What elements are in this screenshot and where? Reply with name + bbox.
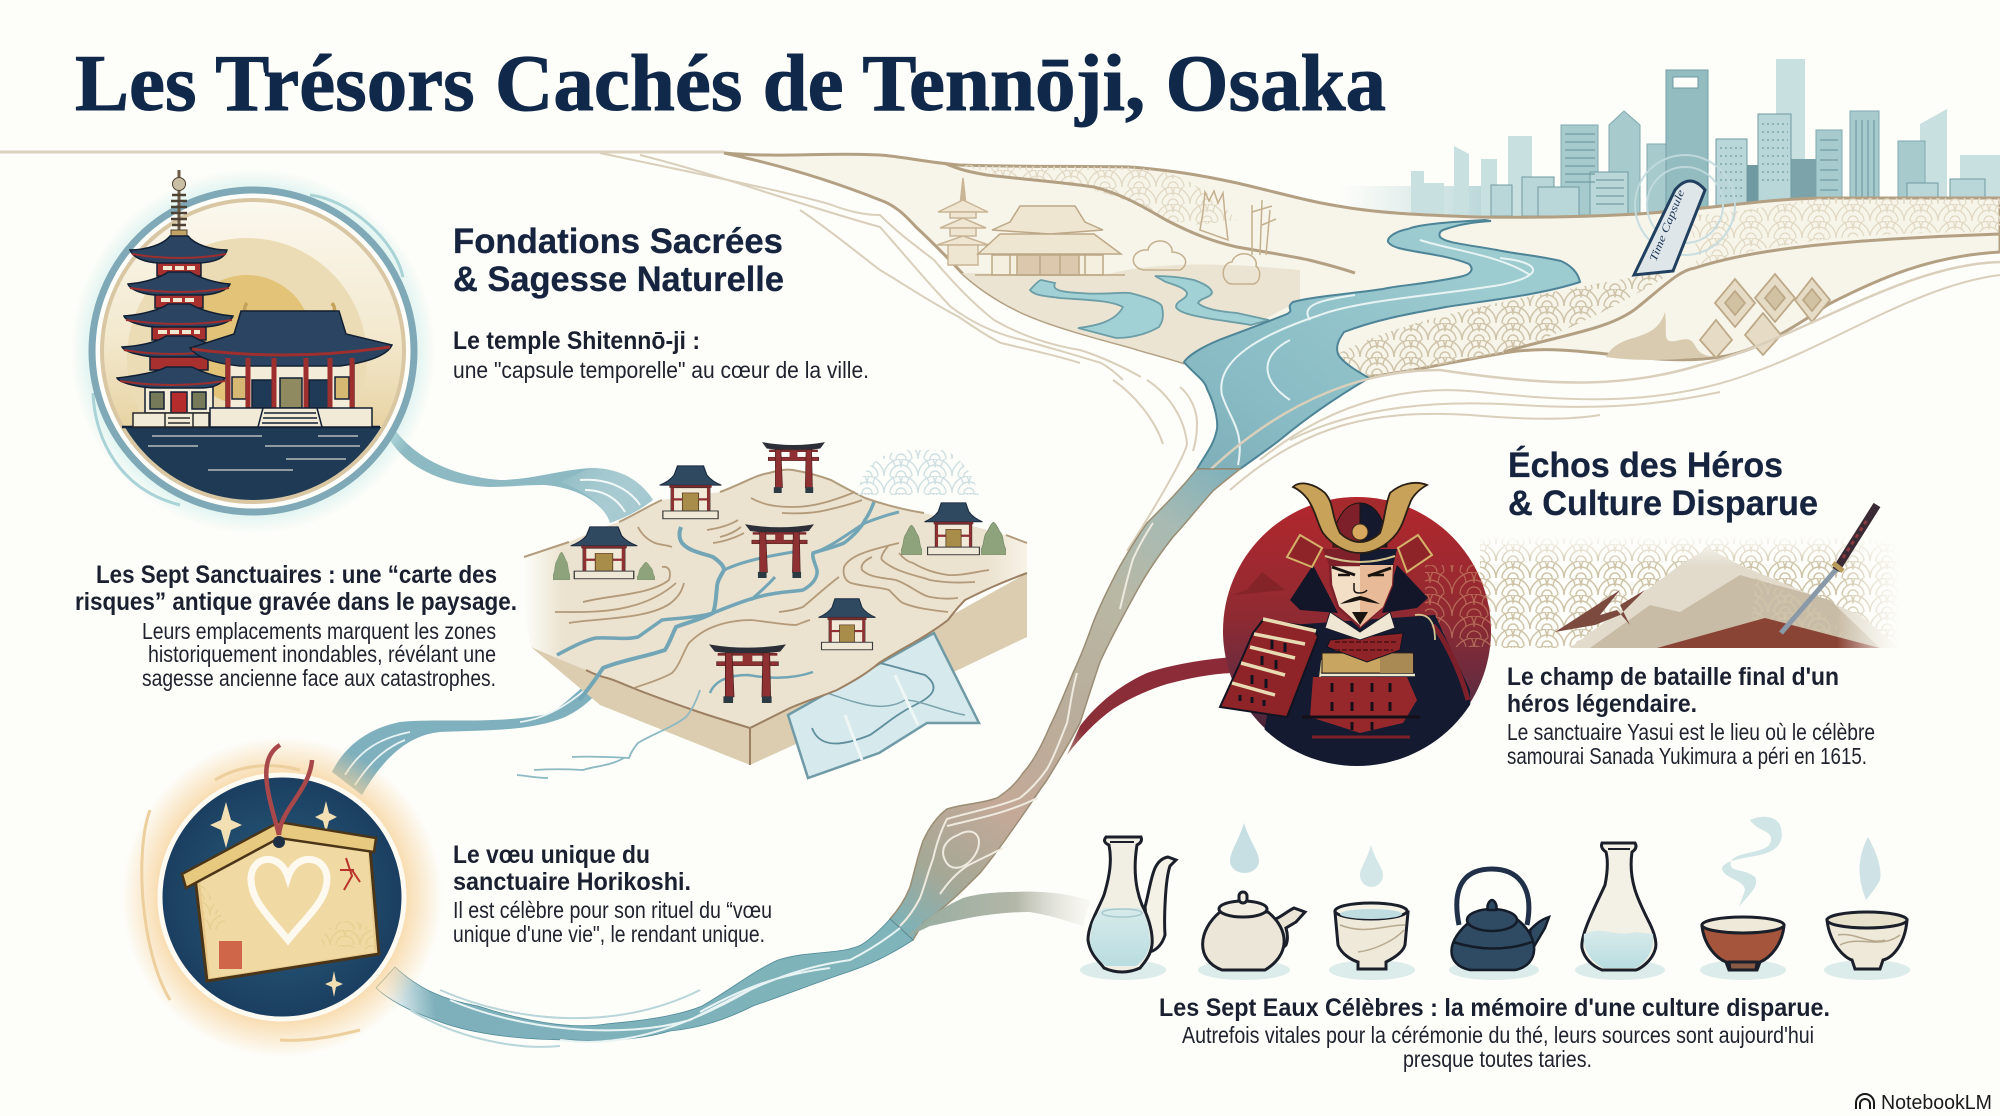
time capsule monument	[1634, 181, 1705, 275]
ink-wash pagoda in the distance	[937, 178, 989, 265]
seigaiha diamonds motif	[1700, 274, 1830, 358]
vessel 1: ewer	[1088, 837, 1176, 972]
island map with seven shrines	[523, 442, 1027, 765]
halo swooshes	[142, 766, 360, 1040]
main trunk ribbon	[890, 469, 1240, 940]
trunk contour lines	[900, 523, 1153, 926]
text: seven famous waters: Autrefois vitales pour la cérémonie du thé, leurs sources sont aujourd'hui	[1182, 1022, 1814, 1048]
plaque body	[195, 835, 379, 981]
text: wish of Horikoshi shrine: Il est célèbre pour son rituel du “vœu	[453, 897, 772, 923]
text: wish of Horikoshi shrine: Le vœu unique du	[453, 841, 650, 869]
time capsule monument: Time Capsule	[1648, 188, 1687, 263]
upper outline	[524, 470, 1027, 557]
left shoulder guard	[1220, 619, 1318, 717]
seven tea vessels row	[1080, 817, 1910, 980]
halo	[122, 737, 442, 1057]
river channels on island	[557, 502, 899, 700]
medallion: ema wooden wish plaque	[122, 737, 442, 1057]
main hall	[190, 303, 392, 427]
small tributary stream	[1030, 276, 1269, 338]
sandy valley floor	[962, 265, 1300, 363]
text: seven famous waters: presque toutes taries.	[1403, 1046, 1592, 1072]
heading: Fondations Sacrées & Sagesse Naturelle: Fondations Sacrées	[453, 222, 783, 261]
vessel 7: pale cup	[1827, 912, 1907, 969]
halo	[71, 169, 435, 533]
torii 3	[709, 644, 786, 703]
landscape: hills from the old temple to the modern city	[724, 153, 2000, 469]
ribbon: island to ema	[332, 668, 607, 795]
collar	[1325, 612, 1395, 640]
torii 2	[745, 524, 814, 578]
vessel 3: ceramic cup	[1335, 903, 1408, 969]
steam 2	[1860, 837, 1880, 900]
kanji stamp	[219, 941, 242, 969]
text: temple Shitennō-ji: une "capsule temporelle" au cœur de la ville.	[453, 357, 869, 383]
steam 1	[1722, 817, 1782, 907]
sparkles	[210, 801, 343, 997]
neck guard flaps	[1290, 565, 1428, 613]
text: wish of Horikoshi shrine: unique d'une vie", le rendant unique.	[453, 921, 765, 947]
decorative flow lines	[600, 153, 2000, 551]
background wave pattern	[1425, 565, 1495, 647]
text: seven famous waters	[1159, 994, 1830, 1072]
text: temple Shitennō-ji	[453, 327, 869, 383]
ribbon: temple to island	[390, 430, 653, 523]
red sun disc	[1223, 497, 1491, 765]
distant pine trees	[1133, 191, 1276, 284]
text: temple Shitennō-ji: Le temple Shitennō-ji :	[453, 327, 700, 355]
inner ring	[102, 200, 404, 502]
contour lines	[555, 492, 989, 688]
water drop 2	[1360, 845, 1383, 887]
trees near shrines	[553, 522, 1006, 580]
medallion: samurai Sanada Yukimura	[1220, 483, 1900, 780]
face	[1330, 565, 1393, 627]
ink-wash temple hall in the distance	[975, 206, 1125, 275]
vessel 6: red bowl	[1702, 917, 1784, 970]
side wings	[1287, 535, 1432, 572]
glowing signal arcs around the capsule	[1635, 155, 1735, 255]
medallion: Shitennō-ji temple	[71, 169, 435, 533]
golden crest horns	[1293, 483, 1427, 553]
shrine 3	[925, 503, 982, 555]
pattern cloud	[858, 450, 979, 495]
white heart	[251, 859, 327, 940]
heading: Fondations Sacrées & Sagesse Naturelle	[453, 222, 784, 299]
distant red mountain	[1232, 572, 1285, 595]
vessel 4: iron kettle	[1451, 869, 1549, 970]
heading: Échos des Héros & Culture Disparue: & Culture Disparue	[1508, 484, 1818, 523]
shrine 4	[818, 599, 876, 650]
setting sun	[126, 238, 382, 500]
text: seven shrines: sagesse ancienne face aux catastrophes.	[142, 665, 496, 691]
text: battlefield of a legendary hero: Le sanctuaire Yasui est le lieu où le célèbre	[1507, 719, 1875, 745]
vessel plates	[1080, 960, 1910, 980]
text: seven shrines: Les Sept Sanctuaires : une “carte des	[96, 561, 497, 589]
breastplate	[1302, 633, 1420, 737]
ribbon to Sept Eaux	[905, 892, 1090, 938]
patterned valley band	[1338, 270, 1676, 377]
island front face: bedrock	[531, 573, 1027, 765]
text: battlefield of a legendary hero: Le champ de bataille final d'un	[1507, 663, 1839, 691]
header divider line	[0, 150, 724, 154]
medallion rim	[92, 190, 414, 512]
title: Les Trésors Cachés de Tennōji, Osaka	[75, 38, 1386, 128]
heading: Fondations Sacrées & Sagesse Naturelle: & Sagesse Naturelle	[453, 260, 784, 299]
hill ridge lines	[944, 163, 2000, 352]
trickling stream under island	[517, 690, 700, 778]
ink swirl motif	[1606, 312, 1712, 360]
plaque roof beam	[182, 822, 376, 888]
text: battlefield of a legendary hero: samourai Sanada Yukimura a péri en 1615.	[1507, 743, 1867, 769]
helmet	[1323, 500, 1397, 565]
vessel 5: water bottle	[1582, 843, 1656, 970]
shrine 1	[660, 466, 721, 519]
ribbon: ema to trunk	[376, 919, 913, 1047]
ribbon: samurai to trunk	[1067, 657, 1232, 755]
text: wish of Horikoshi shrine: sanctuaire Horikoshi.	[453, 868, 691, 896]
torii 1	[762, 442, 825, 493]
text: seven shrines: risques” antique gravée dans le paysage.	[75, 588, 517, 616]
moustache and beard	[1340, 596, 1380, 625]
front edge outline	[586, 573, 1027, 765]
vessel 2: white teapot	[1203, 892, 1305, 970]
heading: Échos des Héros & Culture Disparue	[1508, 445, 1818, 523]
main turquoise river	[1184, 220, 1580, 469]
text: battlefield of a legendary hero: héros légendaire.	[1507, 690, 1697, 718]
shrine 2	[571, 527, 637, 579]
wave-patterned upper-left hill	[959, 165, 1237, 225]
text: seven shrines: historiquement inondables, révélant une	[148, 641, 496, 667]
five-storey pagoda	[117, 170, 233, 427]
skyline of modern Osaka	[1340, 59, 2000, 216]
NotebookLM logo: NotebookLM	[1881, 1092, 1992, 1114]
hanging cord	[266, 745, 312, 835]
text: seven shrines: Leurs emplacements marquent les zones	[142, 618, 496, 644]
text: battlefield of a legendary hero	[1507, 663, 1875, 769]
sword planted in ground	[1781, 505, 1877, 633]
text: seven famous waters: Les Sept Eaux Célèbres : la mémoire d'une culture disparue.	[1159, 994, 1830, 1022]
river current lines	[1221, 240, 1533, 465]
outer swoosh arcs	[93, 195, 403, 505]
samurai figure	[1220, 483, 1472, 780]
text: wish of Horikoshi shrine	[453, 841, 772, 947]
night disc	[160, 775, 404, 1019]
text: seven shrines	[75, 561, 517, 691]
heading: Échos des Héros & Culture Disparue: Échos des Héros	[1508, 445, 1783, 485]
folded map sheet	[788, 633, 979, 778]
water drop 1	[1230, 823, 1259, 873]
right shoulder	[1433, 625, 1468, 700]
patterned right ridge	[1680, 198, 2000, 268]
dark torso	[1264, 615, 1470, 766]
battlefield landscape	[1480, 536, 1900, 648]
